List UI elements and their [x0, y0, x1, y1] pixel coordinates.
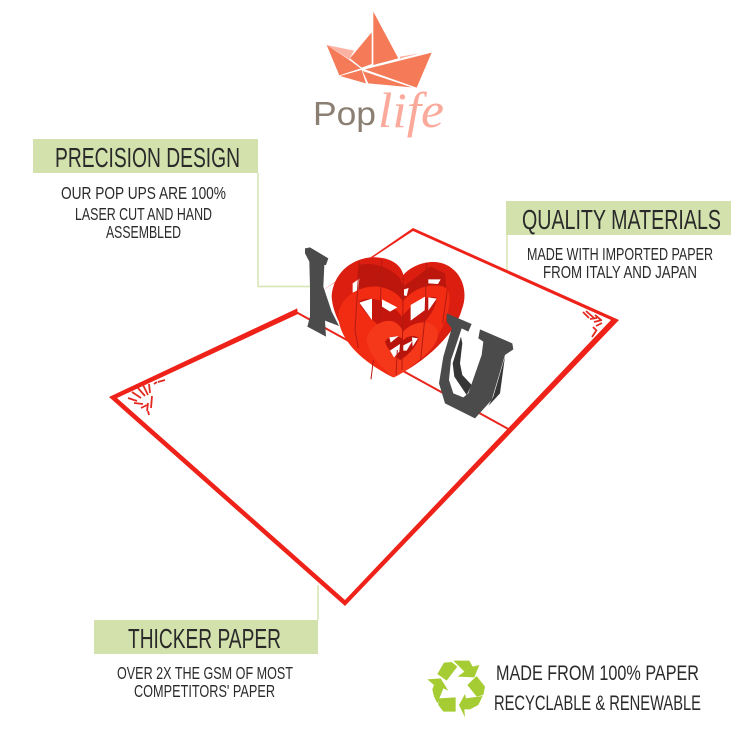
body text	[117, 663, 293, 701]
pop-up card	[109, 228, 619, 606]
panel: precision design	[33, 139, 312, 286]
front heart	[367, 321, 438, 377]
corner ornament: left	[128, 380, 165, 415]
body text: OUR POP UPS ARE 100%	[61, 183, 226, 203]
heart	[332, 257, 465, 379]
card base	[109, 228, 619, 606]
body text: OVER 2X THE GSM OF MOST	[117, 663, 293, 683]
middle heart	[338, 285, 450, 377]
connector line	[258, 173, 312, 286]
heading: PRECISION DESIGN	[55, 142, 240, 173]
panel: recycling note	[427, 661, 701, 717]
heading: THICKER PAPER	[128, 623, 281, 654]
body text	[527, 244, 713, 282]
panel: quality materials	[506, 201, 731, 282]
upper inner shade	[357, 264, 447, 320]
recycling text	[494, 661, 701, 715]
middle heart opening	[358, 297, 437, 340]
logo: Poplife	[313, 12, 444, 138]
heading box	[506, 201, 731, 235]
panel: thicker paper	[94, 585, 318, 701]
body text: ASSEMBLED	[106, 222, 181, 242]
logo word: Pop: Pop	[313, 95, 376, 132]
U back face right	[488, 357, 505, 406]
connector line	[317, 585, 319, 620]
icon: recycle symbol	[427, 661, 485, 717]
corner ornament: right	[583, 311, 602, 337]
white gaps in front heart	[389, 336, 418, 357]
white gaps in back heart	[353, 279, 441, 310]
card inner white	[117, 231, 611, 600]
heading box	[94, 620, 318, 654]
U back face left	[453, 337, 472, 395]
logo word: life: life	[378, 82, 444, 138]
icon: paper boat	[327, 12, 432, 88]
body text: FROM ITALY AND JAPAN	[543, 262, 697, 282]
U front face	[439, 313, 513, 418]
connector line	[506, 235, 508, 270]
body text	[61, 183, 226, 242]
front heart opening	[385, 336, 419, 360]
back heart	[332, 257, 465, 377]
white gaps in middle heart	[359, 297, 437, 321]
body text: LASER CUT AND HAND	[75, 204, 212, 224]
heading box	[33, 139, 258, 173]
letter U	[439, 313, 513, 418]
fold line	[296, 312, 512, 431]
body text: COMPETITORS' PAPER	[134, 681, 275, 701]
letter I	[305, 247, 339, 337]
vertical slats	[355, 260, 447, 379]
